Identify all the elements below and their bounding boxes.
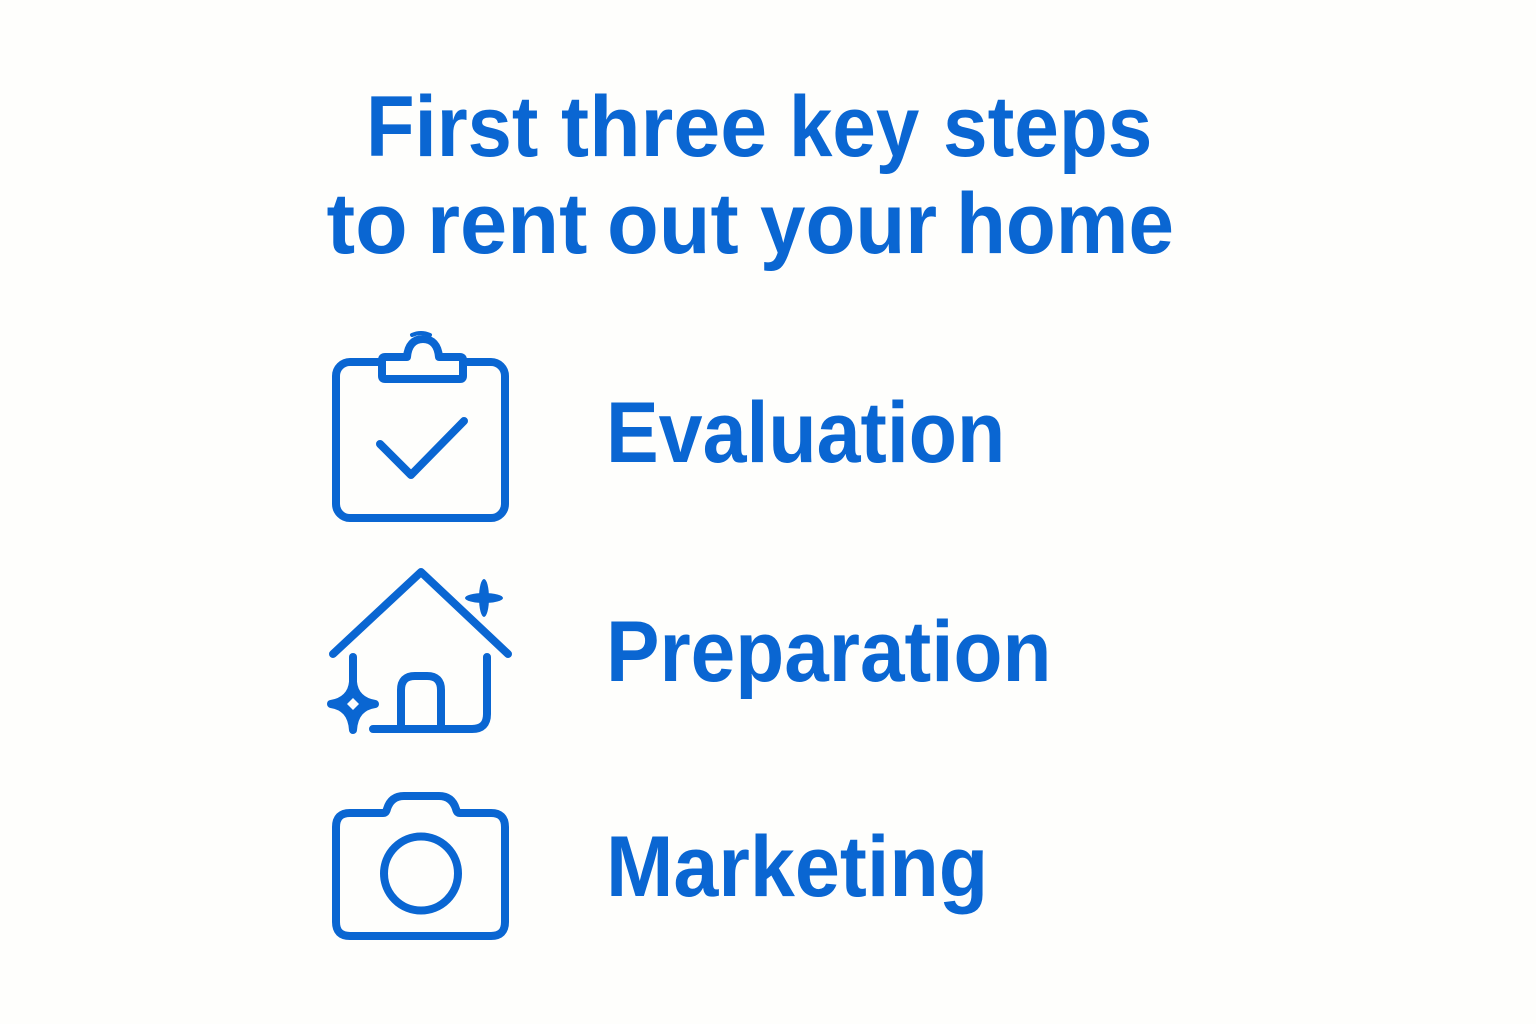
icon: clipboard with check [332,331,509,522]
title: home [956,176,1174,272]
label: Marketing: Marketing [606,819,988,915]
icon: house with sparkles [327,568,512,734]
label: Preparation: Preparation [606,604,1051,700]
title: out [607,176,738,272]
title: your [760,176,937,272]
title: rent [427,176,587,272]
icon: camera [332,792,509,940]
title [326,79,1174,272]
title: to [326,176,408,272]
title: three [561,79,767,175]
title: First [366,79,538,175]
label: Evaluation: Evaluation [606,385,1005,481]
title: key [789,79,919,175]
title: steps [943,79,1152,175]
